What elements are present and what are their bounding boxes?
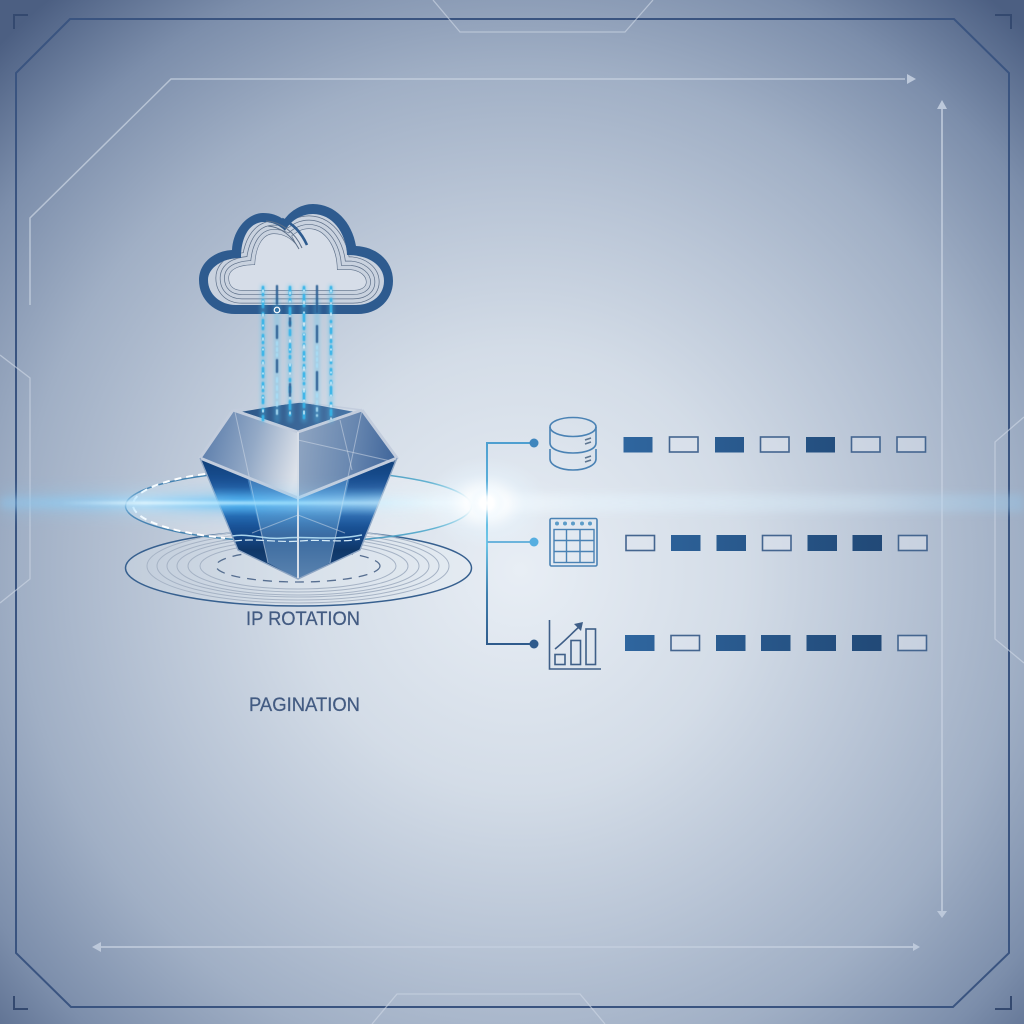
lower ring with concentric ripples	[126, 529, 472, 606]
bottom double-headed horizontal arrow	[92, 942, 920, 952]
icon: bar chart with arrow	[550, 620, 601, 669]
label: IP rotation: IP ROTATION	[246, 608, 360, 630]
cloud icon	[199, 204, 393, 314]
gem top face	[240, 402, 355, 432]
gem crystal	[200, 402, 397, 579]
data blocks row 1	[624, 437, 926, 452]
gem upper right face	[298, 410, 397, 498]
label: pagination: PAGINATION	[249, 694, 360, 716]
upper ring	[126, 470, 472, 542]
data streams falling from cloud into gem	[263, 286, 331, 420]
connector tree linking gem to outputs	[487, 438, 538, 648]
flare bloom over connector	[465, 481, 509, 525]
gem inner lower facets	[247, 477, 350, 579]
gem lower right face	[298, 458, 397, 579]
icon: table	[550, 518, 597, 566]
gem lower left face	[200, 458, 298, 579]
right double-headed vertical arrow	[937, 100, 947, 918]
gem facet lines	[235, 410, 395, 563]
inner top guide line with arrow	[30, 74, 916, 305]
icon: database	[550, 418, 596, 470]
connector node dots	[530, 438, 538, 648]
gem bright edges	[200, 402, 397, 579]
data blocks row 2	[626, 535, 927, 551]
flare: horizontal light beam	[0, 457, 1024, 549]
gem upper left face	[200, 410, 298, 498]
data blocks row 3	[625, 635, 926, 651]
gem waterline	[232, 535, 362, 541]
